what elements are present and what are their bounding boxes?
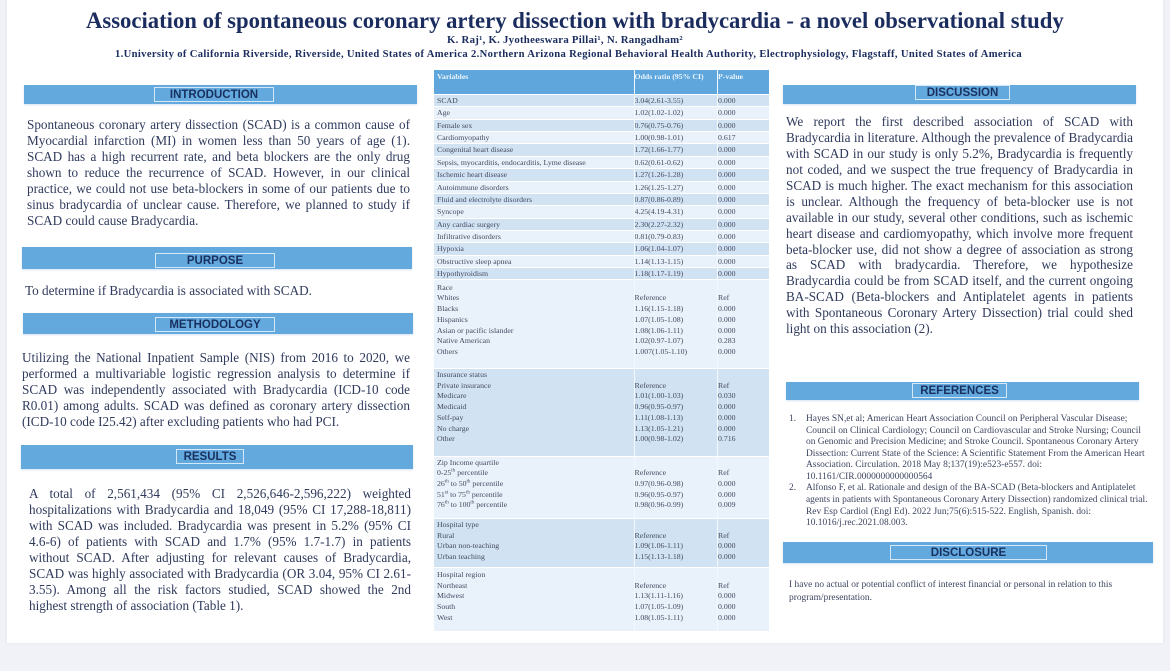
text: discussion: not coded, and we suspect the true frequency of Bradycardia in — [786, 162, 1133, 177]
clinical variables rows: SCAD — [437, 96, 458, 105]
text: discussion: beta-blocker use, did not show a degree of association as strong — [786, 242, 1133, 256]
clinical variables rows: 1.06(1.04-1.07) — [634, 244, 683, 253]
text: introduction: SCAD could cause Bradycardia. — [27, 213, 198, 228]
insurance rows: 1.11(1.08-1.13) — [634, 413, 683, 422]
text: methodology: R0.01) among adults. SCAD was defined as coronary artery dissection — [22, 398, 410, 413]
race rows: 1.08(1.06-1.11) — [634, 326, 683, 335]
heading: disclosure: DISCLOSURE — [931, 547, 1006, 559]
clinical variables rows: Syncope — [437, 207, 464, 216]
hospital region rows: Reference — [634, 581, 666, 590]
hospital region rows: 1.13(1.11-1.16) — [634, 591, 683, 600]
text: discussion: light on this association (2). — [786, 321, 933, 336]
table: odds ratios — [434, 70, 769, 631]
hospital type rows: Hospital type — [437, 520, 479, 529]
heading: introduction — [24, 85, 417, 104]
zip income rows: 0.000 — [718, 479, 736, 488]
text: results: 3.55). Among all the risk factors studied, SCAD showed the 2nd — [29, 582, 411, 597]
insurance rows: Reference — [634, 381, 666, 390]
text: results: without SCAD. After adjusting for relevant causes of Bradycardia, — [29, 550, 411, 565]
heading: methodology: METHODOLOGY — [169, 319, 261, 331]
clinical variables rows: Female sex — [437, 121, 472, 130]
text: references: on Genomic and Precision Medicine; and Stroke Council. Spontaneous Coronary Artery — [806, 437, 1139, 447]
clinical variables rows — [434, 95, 769, 279]
heading: discussion — [783, 85, 1136, 104]
clinical variables rows: 1.72(1.66-1.77) — [634, 145, 683, 154]
text: references: 2. — [789, 483, 796, 493]
zip income rows: 26th to 50th percentile — [437, 478, 503, 488]
race rows: Others — [437, 347, 458, 356]
hospital region rows: 0.000 — [718, 602, 736, 611]
clinical variables rows: 1.00(0.98-1.01) — [634, 133, 683, 142]
text: references: Association. Circulation. 2018 May 8;137(19):e523-e557. doi: — [806, 460, 1042, 470]
hospital type rows: Urban teaching — [437, 552, 485, 561]
race rows: Asian or pacific islander — [437, 326, 513, 335]
insurance rows: Self-pay — [437, 413, 463, 422]
insurance rows: Ref — [718, 381, 729, 390]
zip income rows: Reference — [634, 468, 666, 477]
text: discussion — [786, 114, 1133, 336]
clinical variables rows: 0.62(0.61-0.62) — [634, 158, 683, 167]
clinical variables rows: 0.000 — [718, 182, 736, 192]
heading: discussion: DISCUSSION — [927, 87, 998, 99]
clinical variables rows: 3.04(2.61-3.55) — [634, 96, 683, 105]
text: disclosure: program/presentation. — [789, 593, 872, 603]
heading: purpose — [22, 247, 412, 269]
race rows: 0.283 — [718, 336, 736, 345]
text: discussion: BA-SCAD (Beta-blockers and Antiplatelet agents in patients — [786, 289, 1133, 304]
clinical variables rows: 4.25(4.19-4.31) — [634, 207, 683, 216]
text: discussion: heart disease and cardiomyopathy, which involve more frequent — [786, 226, 1133, 241]
clinical variables rows: Congenital heart disease — [437, 145, 513, 154]
text: references: 10.1016/j.rec.2021.08.003. — [806, 518, 908, 528]
hospital region rows: Midwest — [437, 591, 464, 600]
hospital type rows: Ref — [718, 531, 729, 540]
clinical variables rows: 0.000 — [718, 232, 736, 241]
clinical variables rows: 0.000 — [718, 195, 736, 204]
race rows: 0.000 — [718, 315, 736, 324]
text: results: SCAD was highly associated with Bradycardia (OR 3.04, 95% CI 2.61- — [29, 566, 411, 581]
text: discussion: with SCAD in our study is only 5.2%, Bradycardia is frequently — [786, 146, 1133, 161]
text: disclosure: I have no actual or potential conflict of interest financial or personal in relation to this — [789, 580, 1112, 590]
hospital type rows: 0.000 — [718, 552, 736, 561]
zip income rows: 0.98(0.96-0.99) — [634, 500, 683, 509]
text: introduction: shown to reduce the recurrence of SCAD. However, in our clinical — [27, 165, 410, 180]
clinical variables rows: 1.14(1.13-1.15) — [634, 257, 683, 266]
race rows: Ref — [718, 293, 729, 302]
race rows: 0.000 — [718, 347, 736, 356]
text: discussion: We report the first described association of SCAD with — [786, 114, 1133, 129]
table header row — [434, 70, 769, 94]
race rows: 1.16(1.15-1.18) — [634, 304, 683, 313]
clinical variables rows: 0.000 — [718, 121, 736, 130]
insurance rows: 0.96(0.95-0.97) — [634, 402, 683, 411]
insurance rows: 1.00(0.98-1.02) — [634, 434, 683, 443]
hospital region rows: Ref — [718, 581, 729, 590]
hospital region rows — [434, 568, 769, 631]
hospital region rows: West — [437, 613, 452, 622]
insurance rows: 0.030 — [718, 391, 736, 400]
hospital type rows: 0.000 — [718, 541, 736, 550]
clinical variables rows: 0.000 — [718, 269, 736, 278]
text: discussion: Bradycardia in literature. Although the prevalence of Bradycardia — [786, 130, 1133, 145]
race rows: Hispanics — [437, 315, 468, 324]
text: disclosure — [789, 580, 1112, 603]
zip income rows: 0.009 — [718, 500, 736, 509]
race rows: Whites — [437, 293, 459, 302]
clinical variables rows: 1.26(1.25-1.27) — [634, 182, 683, 192]
clinical variables rows: 0.000 — [718, 145, 736, 154]
text: methodology: performed a multivariable logistic regression analysis to determine if — [22, 366, 410, 381]
zip income rows: Ref — [718, 468, 729, 477]
text: discussion: with Spontaneous Coronary Artery Dissection) trial could shed — [786, 305, 1133, 320]
hospital region rows: Hospital region — [437, 570, 485, 579]
text: results: hospitalizations with Bradycardia and 18,049 (95% CI 17,288-18,811) — [29, 502, 411, 517]
hospital type rows: 1.15(1.13-1.18) — [634, 552, 683, 561]
insurance rows: Medicaid — [437, 402, 466, 411]
authors: K. Raj¹, K. Jyotheeswara Pillai¹, N. Rangadham² — [447, 34, 683, 46]
zip income rows: 51st to 75th percentile — [437, 489, 503, 499]
text: methodology — [22, 350, 410, 429]
text: references: Hayes SN,et al; American Heart Association Council on Peripheral Vascular Disease; — [806, 414, 1127, 424]
clinical variables rows: 1.18(1.17-1.19) — [634, 269, 683, 278]
insurance rows: 0.000 — [718, 424, 736, 433]
race rows: Reference — [634, 293, 666, 302]
clinical variables rows: 0.000 — [718, 244, 736, 253]
race rows: 0.000 — [718, 304, 736, 313]
text: methodology: SCAD was independently associated with Bradycardia (ICD-10 code — [22, 382, 410, 397]
text: discussion: available in our study, several other conditions, such as ischemic — [786, 210, 1133, 225]
insurance rows: 0.716 — [718, 434, 736, 443]
clinical variables rows: 0.000 — [718, 207, 736, 216]
text: references: Rev Esp Cardiol (Engl Ed). 2022 Jun;75(6):515-522. English, Spanish. doi: — [806, 507, 1091, 517]
insurance rows: Insurance status — [437, 370, 487, 379]
text: references — [789, 414, 1147, 528]
text: references: Council on Clinical Cardiology; Council on Cardiovascular and Stroke Nursing; Council — [806, 426, 1141, 436]
text: results: A total of 2,561,434 (95% CI 2,526,646-2,596,222) weighted — [29, 486, 411, 501]
hospital region rows: 0.000 — [718, 591, 736, 600]
text: results: highest strength of association (Table 1). — [29, 598, 243, 613]
clinical variables rows: 0.87(0.86-0.89) — [634, 195, 683, 204]
text: results: with SCAD was included. Bradycardia was present in 5.2% (95% CI — [29, 518, 411, 533]
table header row: Variables — [437, 72, 468, 81]
affiliations: 1.University of California Riverside, Riverside, United States of America 2.Northern Arizona Regional Behavioral Health Authority, Electrophysiology, Flagstaff, United States of America — [115, 49, 1022, 60]
text: introduction: Myocardial infarction (MI) in women less than 50 years of age (1). — [27, 133, 410, 148]
hospital type rows: 1.09(1.06-1.11) — [634, 541, 683, 550]
hospital type rows: Urban non-teaching — [437, 541, 499, 550]
heading: purpose: PURPOSE — [187, 255, 243, 267]
text: discussion: SCAD is much higher. The exact mechanism for this association — [786, 178, 1133, 193]
insurance rows: Other — [437, 434, 455, 443]
insurance rows: No charge — [437, 424, 469, 433]
hospital type rows — [434, 519, 769, 567]
race rows: 1.07(1.05-1.08) — [634, 315, 683, 324]
insurance rows: 0.000 — [718, 413, 736, 422]
clinical variables rows: Obstructive sleep apnea — [437, 257, 511, 266]
hospital region rows: South — [437, 602, 455, 611]
insurance rows: 1.13(1.05-1.21) — [634, 424, 683, 433]
clinical variables rows: Age — [437, 108, 450, 117]
text: discussion: Bradycardia could be from SCAD itself, and the current ongoing — [786, 273, 1133, 288]
heading: results: RESULTS — [184, 451, 236, 463]
insurance rows: Medicare — [437, 391, 466, 400]
hospital type rows: Reference — [634, 531, 666, 540]
heading: disclosure — [783, 542, 1153, 563]
insurance rows: 0.000 — [718, 402, 736, 411]
hospital region rows: 1.07(1.05-1.09) — [634, 602, 683, 611]
zip income rows: 76th to 100th percentile — [437, 499, 507, 509]
clinical variables rows: Any cardiac surgery — [437, 220, 500, 229]
heading: results — [21, 445, 413, 469]
zip income rows: 0-25th percentile — [437, 467, 488, 477]
text: references: 10.1161/CIR.0000000000000564 — [806, 472, 932, 482]
text: references: 1. — [789, 414, 796, 424]
text: introduction: Spontaneous coronary artery dissection (SCAD) is a common cause of — [27, 117, 410, 132]
clinical variables rows: Hypoxia — [437, 244, 464, 253]
hospital region rows: Northeast — [437, 581, 467, 590]
race rows: 0.000 — [718, 326, 736, 335]
zip income rows: 0.97(0.96-0.98) — [634, 479, 683, 488]
race rows: Blacks — [437, 304, 458, 313]
zip income rows: 0.000 — [718, 490, 736, 499]
text: results: 4.6-6) of patients with SCAD and 1.7% (95% 1.7-1.7) in patients — [29, 534, 411, 549]
heading: methodology — [23, 313, 413, 334]
text: references: agents in patients with Spontaneous Coronary Artery Dissection) randomized clinical trial. — [806, 495, 1147, 505]
text: references: Alfonso F, et al. Rationale and design of the BA-SCAD (Beta-blockers and Antiplatelet — [806, 483, 1135, 493]
clinical variables rows: 0.000 — [718, 220, 736, 229]
clinical variables rows: 0.617 — [718, 133, 736, 142]
clinical variables rows: 0.000 — [718, 158, 736, 167]
text: introduction: SCAD has a high recurrent rate, and beta blockers are the only drug — [27, 149, 410, 164]
insurance rows: Private insurance — [437, 381, 491, 390]
heading: references — [786, 382, 1139, 400]
text: methodology: (ICD-10 code I25.42) after excluding patients who had PCI. — [22, 414, 339, 429]
clinical variables rows: Cardiomyopathy — [437, 133, 489, 142]
zip income rows: 0.96(0.95-0.97) — [634, 490, 683, 499]
clinical variables rows: 0.000 — [718, 108, 736, 117]
clinical variables rows: Hypothyroidism — [437, 269, 488, 278]
clinical variables rows: 1.02(1.02-1.02) — [634, 108, 683, 117]
insurance rows — [434, 369, 769, 456]
text: methodology: Utilizing the National Inpatient Sample (NIS) from 2016 to 2020, we — [22, 350, 410, 365]
hospital region rows: 0.000 — [718, 613, 736, 622]
clinical variables rows: Infiltrative disorders — [437, 232, 501, 241]
clinical variables rows: 1.27(1.26-1.28) — [634, 170, 683, 179]
text: results — [29, 486, 411, 613]
heading: introduction: INTRODUCTION — [170, 89, 258, 101]
clinical variables rows: 0.000 — [718, 257, 736, 266]
heading: references: REFERENCES — [920, 385, 999, 397]
title: Association of spontaneous coronary artery dissection with bradycardia - a novel observational study — [86, 8, 1064, 33]
hospital region rows: 1.08(1.05-1.11) — [634, 613, 683, 622]
race rows: 1.02(0.97-1.07) — [634, 336, 683, 345]
race rows: Native American — [437, 336, 490, 345]
clinical variables rows: Autoimmune disorders — [437, 182, 509, 192]
race rows: 1.007(1.05-1.10) — [634, 347, 687, 356]
zip income rows: Zip Income quartile — [437, 458, 499, 467]
text: introduction — [27, 117, 410, 228]
race rows: Race — [437, 283, 453, 292]
table header row: P-value — [718, 72, 743, 81]
clinical variables rows: 2.30(2.27-2.32) — [634, 220, 683, 229]
text: introduction: sinus bradycardia of unclear cause. Therefore, we planned to study if — [27, 197, 410, 212]
table header row: Odds ratio (95% CI) — [634, 72, 704, 81]
text: purpose: To determine if Bradycardia is associated with SCAD. — [25, 283, 312, 298]
insurance rows: 1.01(1.00-1.03) — [634, 391, 683, 400]
zip income rows — [434, 457, 769, 518]
text: discussion: is unclear. Although the frequency of beta-blocker use is not — [786, 194, 1133, 209]
clinical variables rows: 0.000 — [718, 170, 736, 179]
hospital type rows: Rural — [437, 531, 454, 540]
text: references: Dissection: Current State of the Science: A Scientific Statement From the American Heart — [806, 449, 1145, 459]
text: introduction: practice, we could not use beta-blockers in some of our patients due to — [27, 181, 410, 196]
text: discussion: as SCAD with bradycardia. Therefore, we hypothesize — [786, 257, 1133, 272]
clinical variables rows: Fluid and electrolyte disorders — [437, 195, 532, 204]
clinical variables rows: 0.81(0.79-0.83) — [634, 232, 683, 241]
clinical variables rows: 0.000 — [718, 96, 736, 105]
clinical variables rows: 0.76(0.75-0.76) — [634, 121, 683, 130]
clinical variables rows: Sepsis, myocarditis, endocarditis, Lyme disease — [437, 158, 586, 167]
clinical variables rows: Ischemic heart disease — [437, 170, 507, 179]
race rows — [434, 280, 769, 368]
